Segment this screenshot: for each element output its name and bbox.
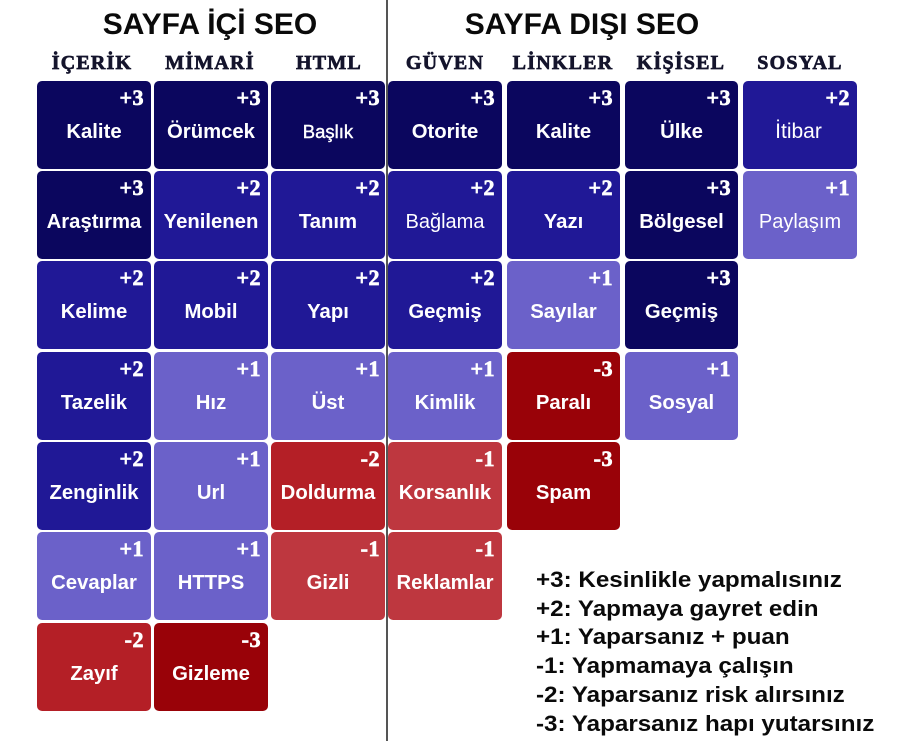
tile: Otorite +3: +3 xyxy=(470,85,495,110)
tile: Araştırma +3 xyxy=(37,171,151,259)
tile: Araştırma +3: +3 xyxy=(119,175,144,200)
tile: Doldurma -2: Doldurma xyxy=(281,482,375,504)
tile: Sosyal +1: +1 xyxy=(706,356,731,381)
tile: Yazı +2: +2 xyxy=(588,175,613,200)
tile: HTTPS +1 xyxy=(154,532,268,620)
column heading: html: HTML xyxy=(296,52,362,74)
tile: Sayılar +1: Sayılar xyxy=(530,301,597,323)
tile: Paralı -3 xyxy=(507,352,620,440)
tile: Zayıf -2: -2 xyxy=(125,627,144,652)
tile: Paralı -3: -3 xyxy=(594,356,613,381)
tile: Reklamlar -1 xyxy=(388,532,502,620)
tile: Araştırma +3: Araştırma xyxy=(47,211,141,233)
tile: Yenilenen +2: Yenilenen xyxy=(164,211,258,233)
tile: Kalite +3 (linkler): Kalite xyxy=(536,121,591,143)
tile: Başlık +3 xyxy=(271,81,385,169)
tile: Üst +1: Üst xyxy=(312,392,344,414)
column heading: guven: GÜVEN xyxy=(406,52,484,74)
tile: Üst +1 xyxy=(271,352,385,440)
column heading: mimari: MİMARİ xyxy=(165,52,255,74)
tile: Başlık +3: +3 xyxy=(355,85,380,110)
tile: Sayılar +1: +1 xyxy=(588,265,613,290)
legend row +3: +3: Kesinlikle yapmalısınız xyxy=(536,567,842,592)
tile: Url +1 xyxy=(154,442,268,530)
tile: Başlık +3: Başlık xyxy=(303,121,353,142)
tile: Kalite +3 (linkler): +3 xyxy=(588,85,613,110)
tile: Paylaşım +1 xyxy=(743,171,857,259)
tile: Spam -3: Spam xyxy=(536,482,591,504)
tile: Otorite +3: Otorite xyxy=(412,121,478,143)
tile: Tanım +2: +2 xyxy=(355,175,380,200)
tile: Kelime +2: +2 xyxy=(119,265,144,290)
tile: Geçmiş +2 xyxy=(388,261,502,349)
tile: Zayıf -2: Zayıf xyxy=(70,663,118,685)
tile: Paylaşım +1: +1 xyxy=(825,175,850,200)
tile: HTTPS +1: HTTPS xyxy=(178,572,244,594)
tile: Bölgesel +3: Bölgesel xyxy=(639,211,724,233)
tile: Kimlik +1: Kimlik xyxy=(415,392,475,414)
tile: Korsanlık -1 xyxy=(388,442,502,530)
legend xyxy=(536,567,874,736)
tile: Kimlik +1 xyxy=(388,352,502,440)
tile: Gizleme -3 xyxy=(154,623,268,711)
tile: Cevaplar +1: Cevaplar xyxy=(51,572,137,594)
tile: Yenilenen +2: +2 xyxy=(236,175,261,200)
tile: Ülke +3: +3 xyxy=(706,85,731,110)
tile: Geçmiş +3: +3 xyxy=(706,265,731,290)
tile: Doldurma -2: -2 xyxy=(361,446,380,471)
tile: Geçmiş +3: Geçmiş xyxy=(645,301,718,323)
tile: Tazelik +2 xyxy=(37,352,151,440)
tile: Örümcek +3 xyxy=(154,81,268,169)
tile: Sosyal +1: Sosyal xyxy=(649,392,714,414)
column heading: linkler: LİNKLER xyxy=(513,52,613,74)
tile: Bağlama +2 xyxy=(388,171,502,259)
tile: Paylaşım +1: Paylaşım xyxy=(759,211,841,233)
tile: Hız +1: +1 xyxy=(236,356,261,381)
tile: Zenginlik +2: Zenginlik xyxy=(49,482,139,504)
tile: İtibar +2: +2 xyxy=(825,85,850,110)
tile: Gizli -1: -1 xyxy=(361,536,380,561)
legend row +2: +2: Yapmaya gayret edin xyxy=(536,596,819,621)
tile: Tazelik +2: +2 xyxy=(119,356,144,381)
tile: Hız +1: Hız xyxy=(196,392,226,414)
tile: Gizleme -3: Gizleme xyxy=(172,663,250,685)
tile: Geçmiş +2: Geçmiş xyxy=(408,301,482,323)
tile: Yapı +2: Yapı xyxy=(307,301,349,323)
tile: Cevaplar +1 xyxy=(37,532,151,620)
tile: Geçmiş +2: +2 xyxy=(470,265,495,290)
heading: sayfa disi seo: SAYFA DIŞI SEO xyxy=(465,8,699,41)
tile: Spam -3: -3 xyxy=(594,446,613,471)
tile: Url +1: +1 xyxy=(236,446,261,471)
tile: Reklamlar -1: Reklamlar xyxy=(397,572,493,594)
tile: Bölgesel +3 xyxy=(625,171,738,259)
tile: Sayılar +1 xyxy=(507,261,620,349)
tile: Korsanlık -1: -1 xyxy=(476,446,495,471)
tile: Sosyal +1 xyxy=(625,352,738,440)
tile: Bölgesel +3: +3 xyxy=(706,175,731,200)
tile: Gizli -1 xyxy=(271,532,385,620)
tile: İtibar +2 xyxy=(743,81,857,169)
tile: Yapı +2 xyxy=(271,261,385,349)
tile: Cevaplar +1: +1 xyxy=(119,536,144,561)
tile: Mobil +2 xyxy=(154,261,268,349)
tile: Kalite +3: +3 xyxy=(119,85,144,110)
tile: Zenginlik +2: +2 xyxy=(119,446,144,471)
tile: Kalite +3 xyxy=(37,81,151,169)
tile: Kimlik +1: +1 xyxy=(470,356,495,381)
tile: Örümcek +3: +3 xyxy=(236,85,261,110)
column heading: icerik: İÇERİK xyxy=(52,52,132,74)
tile: Mobil +2: +2 xyxy=(236,265,261,290)
divider line xyxy=(386,0,388,741)
tile: Yazı +2: Yazı xyxy=(544,211,583,233)
tile: HTTPS +1: +1 xyxy=(236,536,261,561)
tile: Üst +1: +1 xyxy=(355,356,380,381)
tile: Kalite +3: Kalite xyxy=(66,121,122,143)
tile: Url +1: Url xyxy=(197,482,225,504)
tile: İtibar +2: İtibar xyxy=(775,120,822,143)
tile: Gizleme -3: -3 xyxy=(242,627,261,652)
heading: sayfa ici seo: SAYFA İÇİ SEO xyxy=(103,8,317,41)
tile: Reklamlar -1: -1 xyxy=(476,536,495,561)
tile: Kelime +2: Kelime xyxy=(61,301,127,323)
legend row -1: -1: Yapmamaya çalışın xyxy=(536,653,794,678)
tile: Yenilenen +2 xyxy=(154,171,268,259)
tile: Paralı -3: Paralı xyxy=(536,392,591,414)
tile: Kelime +2 xyxy=(37,261,151,349)
legend row -3: -3: Yaparsanız hapı yutarsınız xyxy=(536,711,874,736)
tile: Ülke +3 xyxy=(625,81,738,169)
tile: Hız +1 xyxy=(154,352,268,440)
tile: Yapı +2: +2 xyxy=(355,265,380,290)
tile: Örümcek +3: Örümcek xyxy=(167,121,255,143)
legend row +1: +1: Yaparsanız + puan xyxy=(536,624,790,649)
tile: Yazı +2 xyxy=(507,171,620,259)
tile: Bağlama +2: +2 xyxy=(470,175,495,200)
tile: Tazelik +2: Tazelik xyxy=(61,392,127,414)
tile: Mobil +2: Mobil xyxy=(185,301,237,323)
column heading: kisisel: KİŞİSEL xyxy=(637,52,725,74)
tile: Bağlama +2: Bağlama xyxy=(406,211,484,233)
tile: Tanım +2: Tanım xyxy=(299,211,357,233)
tile: Tanım +2 xyxy=(271,171,385,259)
tile: Geçmiş +3 xyxy=(625,261,738,349)
tile: Kalite +3 (linkler) xyxy=(507,81,620,169)
tile: Doldurma -2 xyxy=(271,442,385,530)
column heading: sosyal: SOSYAL xyxy=(757,52,843,74)
tile: Otorite +3 xyxy=(388,81,502,169)
tile: Spam -3 xyxy=(507,442,620,530)
tile: Zenginlik +2 xyxy=(37,442,151,530)
legend row -2: -2: Yaparsanız risk alırsınız xyxy=(536,682,845,707)
tile: Ülke +3: Ülke xyxy=(660,121,703,143)
tile: Gizli -1: Gizli xyxy=(307,572,349,594)
tile: Zayıf -2 xyxy=(37,623,151,711)
tile: Korsanlık -1: Korsanlık xyxy=(399,482,491,504)
